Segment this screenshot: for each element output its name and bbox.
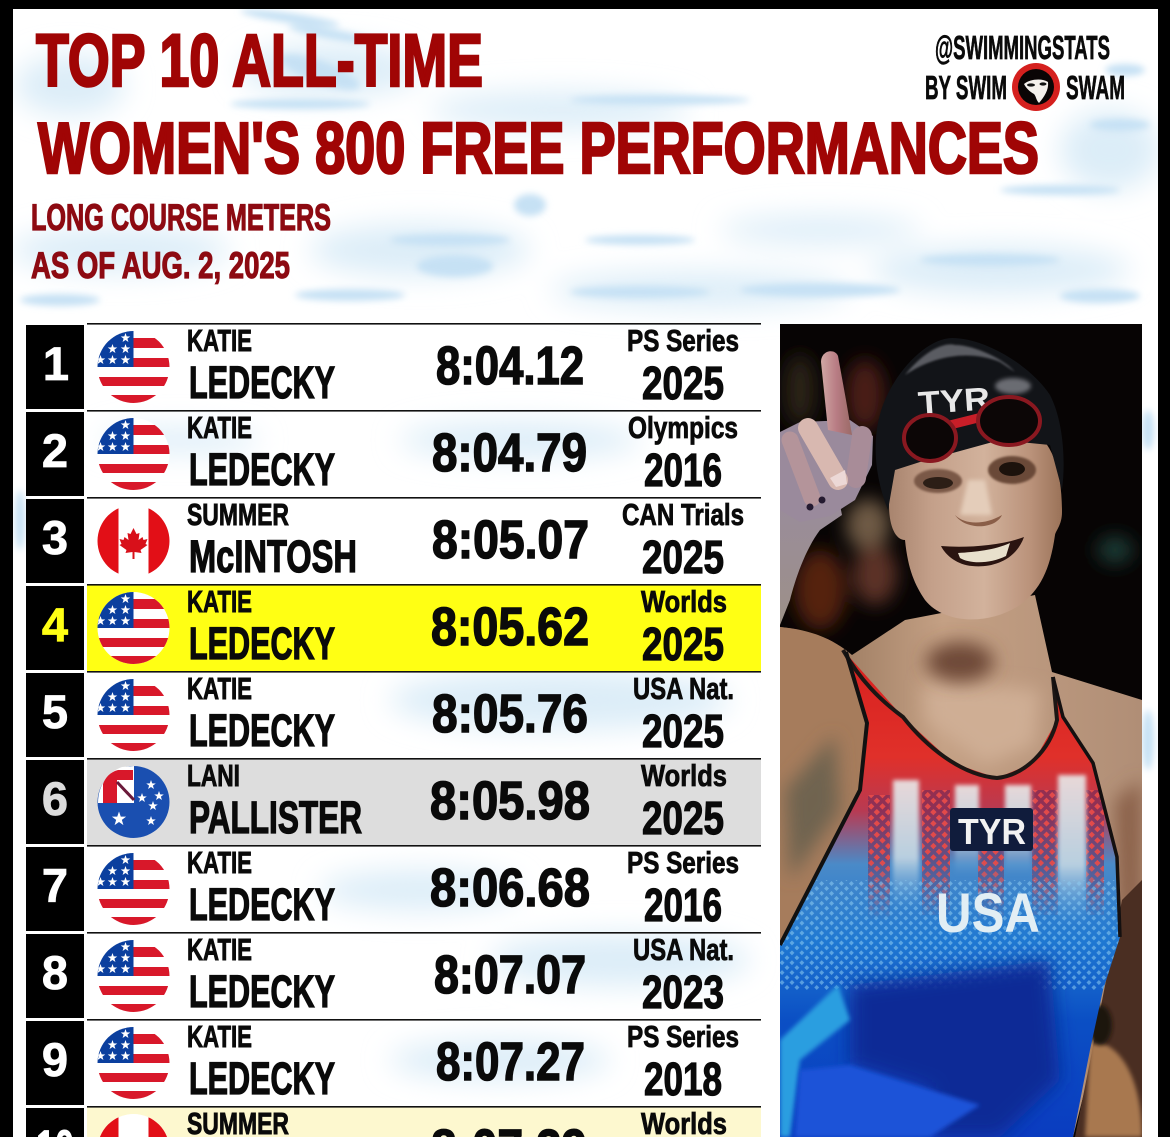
row 6: highlighted grey: PALLISTER [189,792,362,843]
icon: Australia flag [98,766,170,838]
row 5 [26,671,761,757]
brand credit: SwimSwam: BY SWIM [925,69,1007,106]
row 4: highlighted yellow: 2025 [642,618,724,670]
row 9: PS Series [627,1019,739,1054]
neck shadow [926,642,994,682]
swim cap: TYR [917,380,991,421]
row 5: LEDECKY [189,705,335,756]
row 7: LEDECKY [189,879,335,930]
row 9: 8:07.27 [436,1032,585,1092]
row 1 [26,323,761,409]
row 10: highlighted pale yellow, cropped [26,1106,761,1137]
row 4: highlighted yellow: 8:05.62 [431,597,589,657]
row 2: KATIE [187,410,252,445]
row 5: 2025 [642,705,724,757]
row 9: 9 [42,1033,68,1086]
row 1: 2025 [642,357,724,409]
row 7 [26,845,761,931]
row 7: KATIE [187,845,252,880]
row 9: KATIE [187,1019,252,1054]
row 2: LEDECKY [189,444,335,495]
row 2: 2 [42,424,68,477]
subtitle: AS OF AUG. 2, 2025 [31,245,290,286]
row 3: 8:05.07 [432,510,589,570]
eyes [914,456,1036,493]
photo: swimmer with raised finger [780,324,1142,1137]
row 8 [26,932,761,1018]
subtitle [31,197,331,286]
row 6: highlighted grey: Worlds [641,758,727,793]
row 5: USA Nat. [633,671,734,706]
row 7: 8:06.68 [430,858,590,918]
row 8: 8:07.07 [434,945,586,1005]
goggles on forehead [904,397,1040,461]
swimsuit [780,650,1142,1137]
row 8: LEDECKY [189,966,335,1017]
row 9: 2018 [644,1053,722,1105]
row 7: 7 [42,859,68,912]
blurred crowd background [784,354,1133,630]
row 2 [26,410,761,496]
table: rankings [26,323,761,1137]
row 4: highlighted yellow: Worlds [641,584,727,619]
swim cap [876,338,1064,510]
row 2: Olympics [628,410,738,445]
row 6: highlighted grey [26,758,761,845]
row 4: highlighted yellow: KATIE [187,584,252,619]
row 1: 1 [43,337,69,390]
row 1: KATIE [187,323,252,358]
row 8: 2023 [642,966,724,1018]
USA chest text: USA [936,881,1040,944]
TYR chest badge: TYR [958,811,1026,852]
row 5: KATIE [187,671,252,706]
row 1: LEDECKY [189,357,335,408]
row 3: SUMMER [187,497,289,532]
row 5: 5 [42,685,68,738]
face [889,430,1062,619]
row 4: highlighted yellow: 4 [42,598,68,651]
row 2: 8:04.79 [432,423,587,483]
row 6: highlighted grey: 2025 [642,792,724,844]
background person at lower right [1075,880,1142,1137]
title: TOP 10 ALL-TIME [36,19,483,102]
brand credit: SwimSwam [925,29,1125,111]
row 5: 8:05.76 [432,684,588,744]
row 3 [26,497,761,583]
row 3: 2025 [642,531,724,583]
row 1: 8:04.12 [436,336,584,396]
swimsuit neckline trim [843,650,1057,778]
row 6: highlighted grey: LANI [187,758,240,793]
row 3: CAN Trials [622,497,744,532]
smile [941,537,1024,566]
row 8: KATIE [187,932,252,967]
icon: SwimSwam logo [1012,63,1060,111]
row 7: PS Series [627,845,739,880]
row 6: highlighted grey: 8:05.98 [430,771,590,831]
row 3: McINTOSH [189,531,357,582]
row 4: highlighted yellow: LEDECKY [189,618,335,669]
nose [955,515,1002,526]
brand credit: SwimSwam: SWAM [1066,69,1125,106]
row 1: PS Series [627,323,739,358]
row 8: 8 [42,946,68,999]
row 2: 2016 [644,444,722,496]
row 8: USA Nat. [633,932,734,967]
row 7: 2016 [644,879,722,931]
body skin [780,595,1142,1137]
row 6: highlighted grey: 6 [42,772,68,825]
raised arm and hand [780,351,873,625]
subtitle: LONG COURSE METERS [31,197,331,238]
row 9: LEDECKY [189,1053,335,1104]
row 9 [26,1019,761,1105]
row 4: highlighted yellow [26,584,761,671]
row 3: 3 [42,511,68,564]
title [36,19,1039,189]
